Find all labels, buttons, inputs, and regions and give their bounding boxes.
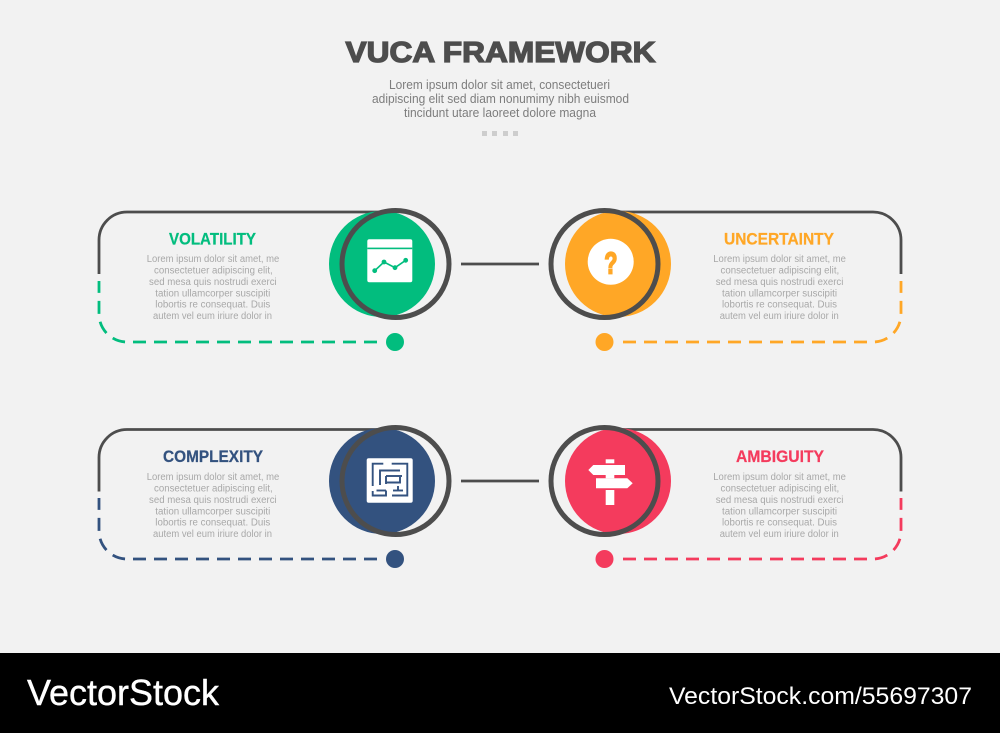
panel: uncertainty: [551, 210, 901, 351]
solid outline: [605, 430, 901, 492]
solid outline: [99, 430, 385, 492]
connector bottom: [461, 480, 539, 482]
solid outline: [99, 212, 385, 274]
body text: consectetuer adipiscing elit,: [720, 484, 839, 494]
body text: Lorem ipsum dolor sit amet, me: [713, 472, 846, 483]
body text: Lorem ipsum dolor sit amet, me: [147, 472, 280, 483]
body text: [147, 472, 280, 540]
body text: autem vel eum iriure dolor in: [720, 311, 839, 322]
title: VUCA FRAMEWORK: [346, 37, 656, 69]
end dot: [596, 550, 614, 568]
body text: lobortis re consequat. Duis: [155, 518, 270, 528]
filled circle: [565, 428, 671, 534]
body text: consectetuer adipiscing elit,: [154, 266, 273, 276]
body text: consectetuer adipiscing elit,: [154, 484, 273, 494]
body text: lobortis re consequat. Duis: [722, 300, 837, 310]
solid outline: [605, 212, 901, 274]
title pagination squares: [482, 131, 518, 136]
body text: lobortis re consequat. Duis: [722, 518, 837, 528]
end dot: [386, 550, 404, 568]
icon: question mark: ?: [604, 246, 617, 280]
subtitle text block: adipiscing elit sed diam nonumimy nibh euismod: [372, 92, 629, 106]
body text: Lorem ipsum dolor sit amet, me: [147, 254, 280, 265]
body text: [713, 472, 846, 540]
footer bar: [0, 653, 1000, 733]
body text: autem vel eum iriure dolor in: [720, 529, 839, 540]
footer url text: VectorStock.com/55697307: [669, 683, 972, 710]
heading: COMPLEXITY: [163, 447, 264, 466]
body text: tation ullamcorper suscipiti: [722, 288, 837, 299]
dashed outline: [623, 498, 901, 559]
subtitle text block: tincidunt utare laoreet dolore magna: [404, 106, 596, 120]
body text: Lorem ipsum dolor sit amet, me: [713, 254, 846, 265]
subtitle text block: [372, 78, 629, 120]
dashed outline: [623, 281, 901, 342]
body text: sed mesa quis nostrudi exerci: [149, 495, 277, 506]
body text: autem vel eum iriure dolor in: [153, 529, 272, 540]
end dot: [596, 333, 614, 351]
filled circle: [329, 211, 435, 317]
heading: UNCERTAINTY: [724, 230, 835, 248]
body text: sed mesa quis nostrudi exerci: [716, 277, 843, 288]
panel: volatility: [99, 210, 449, 351]
body text: sed mesa quis nostrudi exerci: [149, 277, 277, 288]
body text: consectetuer adipiscing elit,: [720, 266, 839, 276]
ring: [342, 210, 449, 318]
body text: tation ullamcorper suscipiti: [155, 288, 270, 299]
ring: [342, 428, 449, 534]
icon: maze: [367, 458, 413, 503]
icon: calendar chart: [367, 239, 412, 282]
body text: autem vel eum iriure dolor in: [153, 311, 272, 322]
panel: ambiguity: [551, 428, 901, 568]
body text: [713, 254, 846, 322]
heading: AMBIGUITY: [736, 447, 825, 466]
filled circle: [329, 428, 435, 534]
ring: [551, 210, 658, 318]
body text: tation ullamcorper suscipiti: [155, 506, 270, 517]
panel: complexity: [99, 428, 449, 568]
ring: [551, 428, 658, 534]
icon: signpost: [588, 459, 633, 505]
footer logo text: VectorStock: [27, 672, 220, 713]
filled circle: [565, 211, 671, 317]
dashed outline: [99, 498, 377, 559]
body text: sed mesa quis nostrudi exerci: [716, 495, 843, 506]
dashed outline: [99, 281, 377, 342]
end dot: [386, 333, 404, 351]
body text: lobortis re consequat. Duis: [155, 300, 270, 310]
connector top: [461, 263, 539, 265]
heading: VOLATILITY: [169, 230, 257, 248]
icon: question mark: [588, 239, 634, 285]
body text: [147, 254, 280, 322]
subtitle text block: Lorem ipsum dolor sit amet, consectetueri: [389, 78, 610, 92]
body text: tation ullamcorper suscipiti: [722, 506, 837, 517]
